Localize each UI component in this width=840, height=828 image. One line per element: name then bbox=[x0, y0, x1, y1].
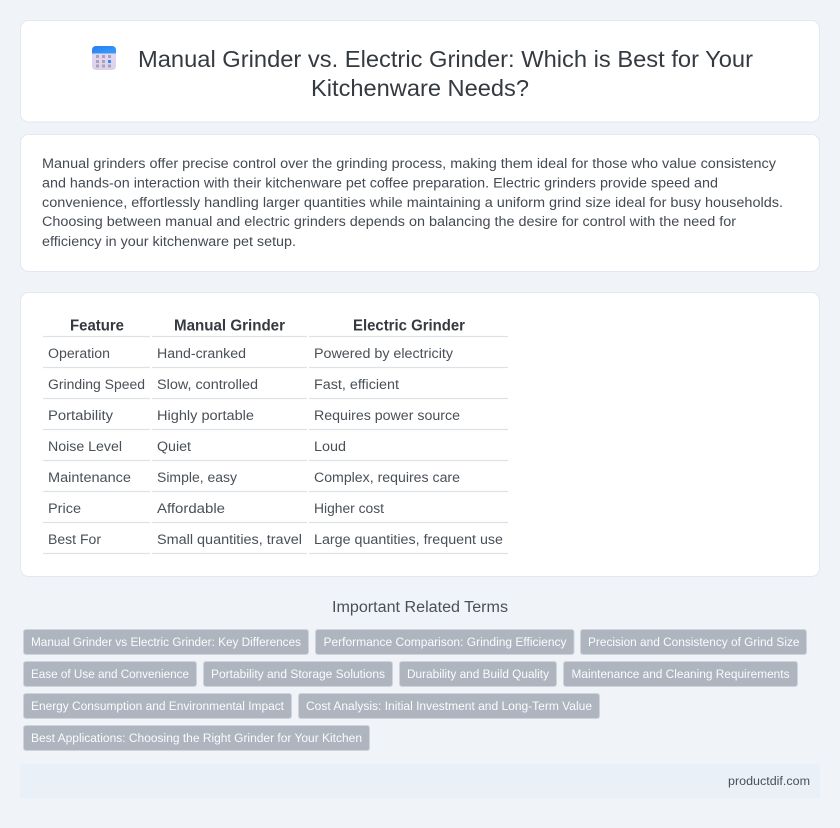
table header row: Manual Grinder bbox=[174, 318, 285, 334]
tag bbox=[24, 694, 292, 718]
panel: intro paragraph bbox=[20, 134, 820, 272]
footer source: productdif.com bbox=[728, 774, 810, 788]
row: best for bbox=[48, 532, 503, 548]
row: operation: Powered by electricity bbox=[314, 346, 454, 362]
table header row: Feature bbox=[70, 318, 124, 334]
row: grinding speed bbox=[48, 377, 399, 393]
row: operation bbox=[48, 346, 454, 362]
row: best for: Small quantities, travel bbox=[157, 532, 302, 548]
row: portability: Portability bbox=[48, 408, 114, 424]
row: price: Higher cost bbox=[314, 501, 384, 517]
icon: calendar bbox=[92, 46, 116, 70]
row: best for: Best For bbox=[48, 532, 101, 548]
row: best for: Large quantities, frequent use bbox=[314, 532, 503, 548]
row: noise level bbox=[48, 439, 346, 455]
tag bbox=[24, 662, 196, 686]
row: grinding speed: Slow, controlled bbox=[157, 377, 258, 393]
row: price bbox=[48, 501, 384, 517]
table header row: Electric Grinder bbox=[353, 318, 465, 334]
intro text bbox=[42, 156, 783, 250]
tag: Maintenance and Cleaning Requirements bbox=[572, 667, 790, 681]
heading: important related terms: Important Related Terms bbox=[332, 599, 508, 616]
tag bbox=[564, 662, 798, 686]
tag: Ease of Use and Convenience bbox=[31, 667, 189, 681]
row: portability: Requires power source bbox=[314, 408, 460, 424]
tag bbox=[400, 662, 556, 686]
panel: header bbox=[20, 20, 820, 122]
intro text: efficiency in your kitchenware pet setup. bbox=[42, 234, 296, 250]
tag: Durability and Build Quality bbox=[407, 667, 550, 681]
title: Kitchenware Needs? bbox=[311, 75, 529, 101]
row: operation: Hand-cranked bbox=[157, 346, 246, 362]
tag bbox=[580, 630, 806, 654]
row: noise level: Noise Level bbox=[48, 439, 122, 455]
row: grinding speed: Fast, efficient bbox=[314, 377, 399, 393]
row: portability bbox=[48, 408, 460, 424]
tag: Portability and Storage Solutions bbox=[211, 667, 385, 681]
tag: Cost Analysis: Initial Investment and Long-Term Value bbox=[306, 699, 592, 713]
tag: Energy Consumption and Environmental Impact bbox=[31, 699, 285, 713]
intro text: convenience, effortlessly handling larger quantities while maintaining a uniform grind size ideal for busy households. bbox=[42, 195, 783, 211]
row: maintenance: Complex, requires care bbox=[314, 470, 460, 486]
row: grinding speed: Grinding Speed bbox=[48, 377, 145, 393]
title bbox=[138, 46, 753, 101]
row: noise level: Quiet bbox=[157, 439, 191, 455]
tag: Precision and Consistency of Grind Size bbox=[588, 635, 800, 649]
row: noise level: Loud bbox=[314, 439, 346, 455]
row: maintenance bbox=[48, 470, 460, 486]
title: Manual Grinder vs. Electric Grinder: Which is Best for Your bbox=[138, 46, 753, 72]
row: portability: Highly portable bbox=[157, 408, 254, 424]
row: price: Price bbox=[48, 501, 81, 517]
tag bbox=[316, 630, 574, 654]
tag bbox=[24, 630, 308, 654]
footer bbox=[20, 764, 820, 798]
row: operation: Operation bbox=[48, 346, 110, 362]
tag bbox=[204, 662, 392, 686]
row: maintenance: Simple, easy bbox=[157, 470, 238, 486]
intro text: Manual grinders offer precise control over the grinding process, making them ideal for those who value consistency bbox=[42, 156, 777, 172]
tag bbox=[298, 694, 600, 718]
panel: comparison table bbox=[20, 292, 820, 576]
intro text: and hands-on interaction with their kitchenware pet coffee preparation. Electric grinders provide speed and bbox=[42, 176, 718, 192]
tag bbox=[24, 726, 370, 750]
row: maintenance: Maintenance bbox=[48, 470, 131, 486]
table header row bbox=[70, 318, 465, 334]
intro text: Choosing between manual and electric grinders depends on balancing the desire for control with the need for bbox=[42, 214, 736, 230]
related term tags bbox=[24, 630, 806, 750]
row: price: Affordable bbox=[157, 501, 225, 517]
tag: Best Applications: Choosing the Right Grinder for Your Kitchen bbox=[31, 731, 362, 745]
tag: Manual Grinder vs Electric Grinder: Key Differences bbox=[31, 635, 301, 649]
tag: Performance Comparison: Grinding Efficiency bbox=[324, 635, 567, 649]
